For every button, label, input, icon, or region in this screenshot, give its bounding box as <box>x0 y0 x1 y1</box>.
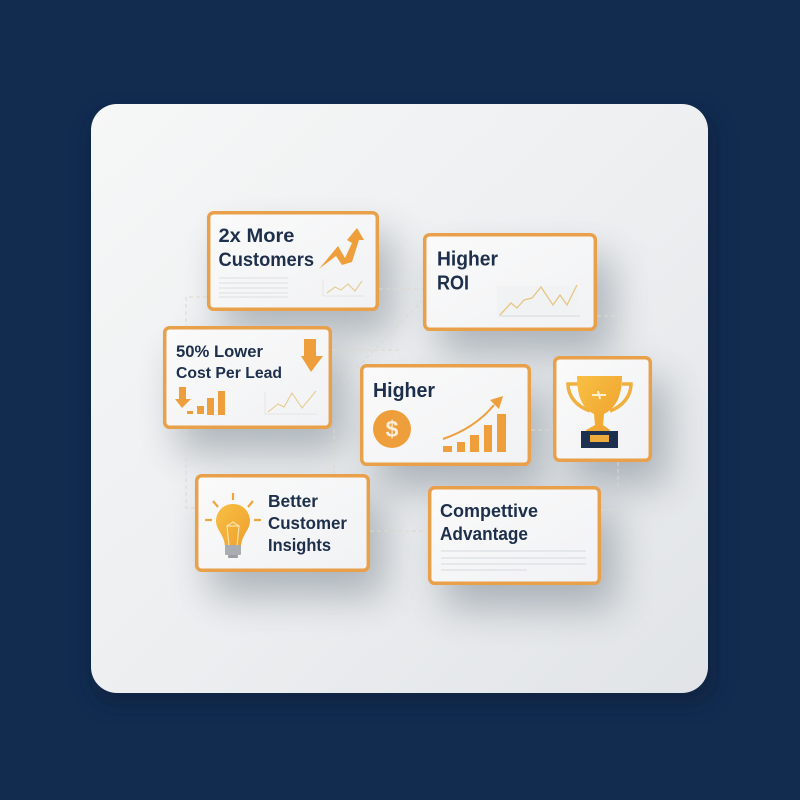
heading: Higher ROI: ROI <box>437 272 469 294</box>
icon: growth bars and arrow <box>443 396 506 452</box>
heading: Better Customer Insights <box>268 491 347 555</box>
card shadows <box>178 235 667 608</box>
card: Competitive Advantage <box>430 488 599 583</box>
card: trophy <box>555 358 650 460</box>
panel shadow <box>91 112 716 704</box>
icon: small down arrow and bars <box>175 387 225 415</box>
heading: 50% Lower Cost Per Lead <box>176 342 282 382</box>
heading: 2x More Customers <box>218 225 314 271</box>
mini line chart <box>323 279 365 296</box>
heading: Better Customer Insights: Insights <box>268 535 331 555</box>
card: 2x More Customers <box>209 213 377 309</box>
icon: dollar coin: $ <box>386 416 399 442</box>
placeholder text lines <box>441 551 586 570</box>
heading: Competitive Advantage: Advantage <box>440 524 528 544</box>
line chart <box>497 285 580 317</box>
panel: main white board <box>91 104 708 693</box>
icon: dollar coin <box>373 410 411 448</box>
card: Better Customer Insights <box>197 476 368 570</box>
heading: Competitive Advantage: Compettive <box>440 501 538 521</box>
heading: Higher ROI <box>437 248 498 294</box>
card: Higher revenue <box>362 366 529 464</box>
heading: 2x More Customers: Customers <box>218 250 314 271</box>
connector lines <box>186 289 618 531</box>
heading: Better Customer Insights: Customer <box>268 513 347 533</box>
icon: rising arrow <box>319 228 364 269</box>
icon: trophy <box>568 376 631 448</box>
heading: Higher: Higher <box>373 380 435 402</box>
icon: down arrow <box>301 339 323 372</box>
heading: Competitive Advantage <box>440 501 538 544</box>
heading: 2x More Customers: 2x More <box>218 225 295 247</box>
icon: light bulb <box>205 493 261 558</box>
card: Higher ROI <box>425 235 595 329</box>
heading: Higher ROI: Higher <box>437 248 498 270</box>
card: 50% Lower Cost Per Lead <box>165 328 330 427</box>
heading: 50% Lower Cost Per Lead: Cost Per Lead <box>176 365 282 382</box>
heading: 50% Lower Cost Per Lead: 50% Lower <box>176 342 263 361</box>
heading: Better Customer Insights: Better <box>268 491 318 511</box>
mini line chart <box>265 391 317 414</box>
placeholder text lines <box>219 278 288 297</box>
